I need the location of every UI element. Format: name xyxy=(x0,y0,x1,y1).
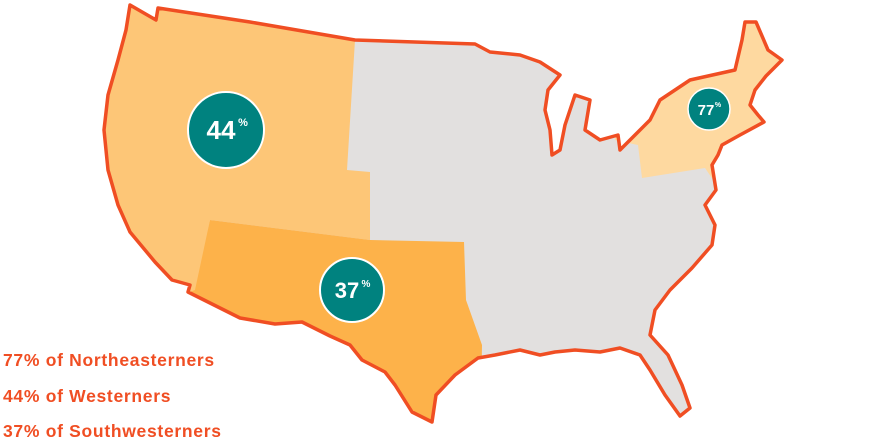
legend: southwesterners: 37% of Southwesterners xyxy=(3,421,222,441)
legend: northeasterners: 77% of Northeasterners xyxy=(3,350,215,370)
badge: 77% northeast: % xyxy=(715,102,722,109)
badge: 37% southwest xyxy=(320,258,384,322)
badge: 77% northeast xyxy=(688,88,730,130)
legend text xyxy=(3,350,222,441)
badge: 37% southwest: 37 xyxy=(335,278,359,303)
region: midwest/south (gray) xyxy=(347,42,714,414)
region: northeast xyxy=(615,24,780,179)
map outline xyxy=(104,5,782,422)
legend: westerners: 44% of Westerners xyxy=(3,386,171,406)
region: southwest xyxy=(191,220,482,420)
badge: 77% northeast: 77 xyxy=(698,102,714,119)
badge: 44% west: % xyxy=(238,117,248,129)
map: united states xyxy=(102,3,784,424)
badge: 37% southwest: % xyxy=(362,279,371,290)
badge: 44% west xyxy=(188,92,264,168)
region: west xyxy=(106,8,370,292)
badge: 44% west: 44 xyxy=(207,115,236,145)
